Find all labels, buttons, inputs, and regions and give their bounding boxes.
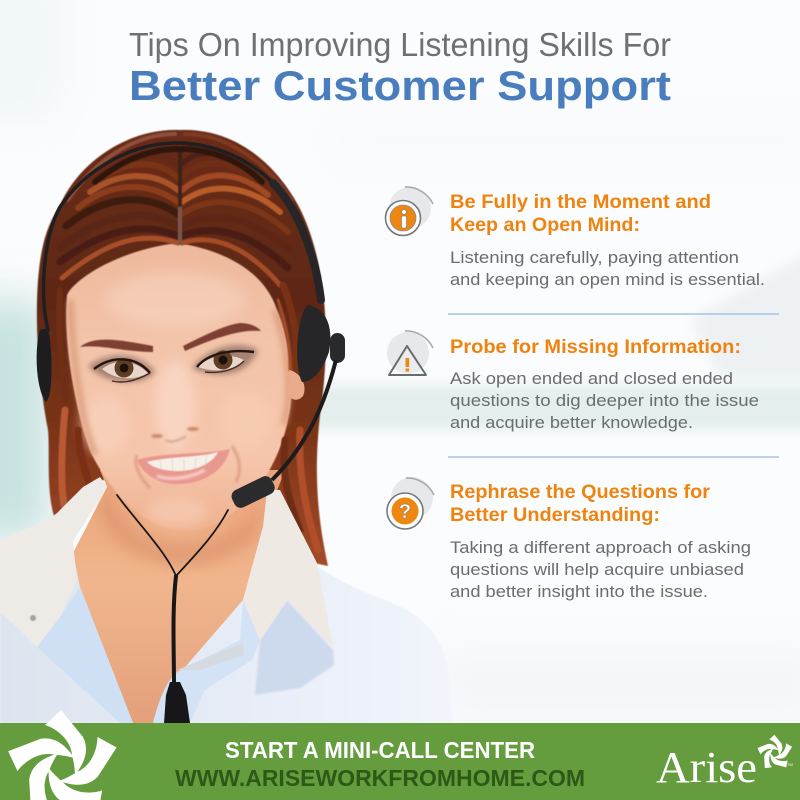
hair back bbox=[37, 130, 328, 566]
tip 1 bbox=[386, 187, 765, 289]
body text bbox=[450, 248, 765, 289]
logo: Arise wordmark bbox=[656, 735, 795, 792]
face highlights bbox=[105, 272, 245, 328]
cable plug bbox=[164, 682, 190, 723]
body text: Taking a different approach of asking bbox=[450, 538, 751, 557]
body text bbox=[450, 369, 759, 432]
icon: warning bbox=[387, 331, 433, 375]
heading: Keep an Open Mind: bbox=[450, 215, 640, 236]
left eyebrow bbox=[80, 340, 153, 352]
logo: Arise wordmark: Arise bbox=[656, 743, 757, 792]
heading bbox=[450, 192, 711, 236]
face edge shading bbox=[70, 300, 289, 455]
neck shadow bbox=[101, 490, 262, 567]
tip 3 bbox=[387, 477, 751, 601]
tip 2 bbox=[387, 331, 759, 432]
body text bbox=[450, 538, 751, 601]
hair strands bbox=[59, 134, 318, 550]
body text: and acquire better knowledge. bbox=[450, 413, 693, 432]
neck and chest skin bbox=[73, 470, 285, 723]
left shirt placket bbox=[37, 587, 133, 723]
left eye bbox=[88, 355, 155, 382]
inner shirt shadow bbox=[177, 643, 244, 670]
boom mic bbox=[229, 360, 336, 510]
body text: Ask open ended and closed ended bbox=[450, 369, 733, 388]
footer call to action: WWW.ARISEWORKFROMHOME.COM bbox=[175, 765, 585, 791]
body text: questions to dig deeper into the issue bbox=[450, 391, 759, 410]
heading: Better Understanding: bbox=[450, 505, 660, 526]
heading: Be Fully in the Moment and bbox=[450, 192, 711, 213]
right shirt shaded panel bbox=[255, 600, 334, 695]
icon: info bbox=[386, 187, 433, 236]
face bbox=[66, 243, 292, 531]
footer call to action: START A MINI-CALL CENTER bbox=[225, 737, 535, 763]
body text: questions will help acquire unbiased bbox=[450, 560, 744, 579]
logo: Arise wordmark: TM bbox=[787, 762, 793, 767]
right collar bbox=[243, 490, 333, 647]
right eye bbox=[192, 345, 258, 374]
left collar bbox=[0, 477, 107, 647]
mouth bbox=[137, 449, 230, 484]
body text: and better insight into the issue. bbox=[450, 582, 708, 601]
icon: question bbox=[387, 477, 434, 529]
woman with headset bbox=[0, 130, 453, 723]
footer band bbox=[0, 710, 800, 800]
heading: Probe for Missing Information: bbox=[450, 337, 741, 358]
headset cable bbox=[117, 495, 228, 685]
title line 1: Tips On Improving Listening Skills For bbox=[129, 26, 671, 63]
headband bbox=[44, 143, 321, 330]
icon: question: ? bbox=[399, 501, 411, 523]
smile creases bbox=[136, 446, 239, 488]
title line 2: Better Customer Support bbox=[129, 62, 671, 109]
title bbox=[129, 26, 671, 109]
footer call to action bbox=[175, 737, 585, 791]
right ear bbox=[288, 370, 305, 400]
logo: large pinwheel bbox=[3, 710, 124, 800]
right shirt placket bbox=[153, 600, 260, 723]
nose bbox=[151, 427, 199, 442]
heading: Rephrase the Questions for bbox=[450, 482, 711, 503]
right eyebrow bbox=[183, 323, 261, 351]
heading bbox=[450, 482, 711, 526]
shirt body bbox=[0, 540, 453, 723]
left ear cup bbox=[37, 328, 52, 402]
body text: and keeping an open mind is essential. bbox=[450, 270, 765, 289]
right ear cup bbox=[297, 305, 345, 382]
body text: Listening carefully, paying attention bbox=[450, 248, 739, 267]
